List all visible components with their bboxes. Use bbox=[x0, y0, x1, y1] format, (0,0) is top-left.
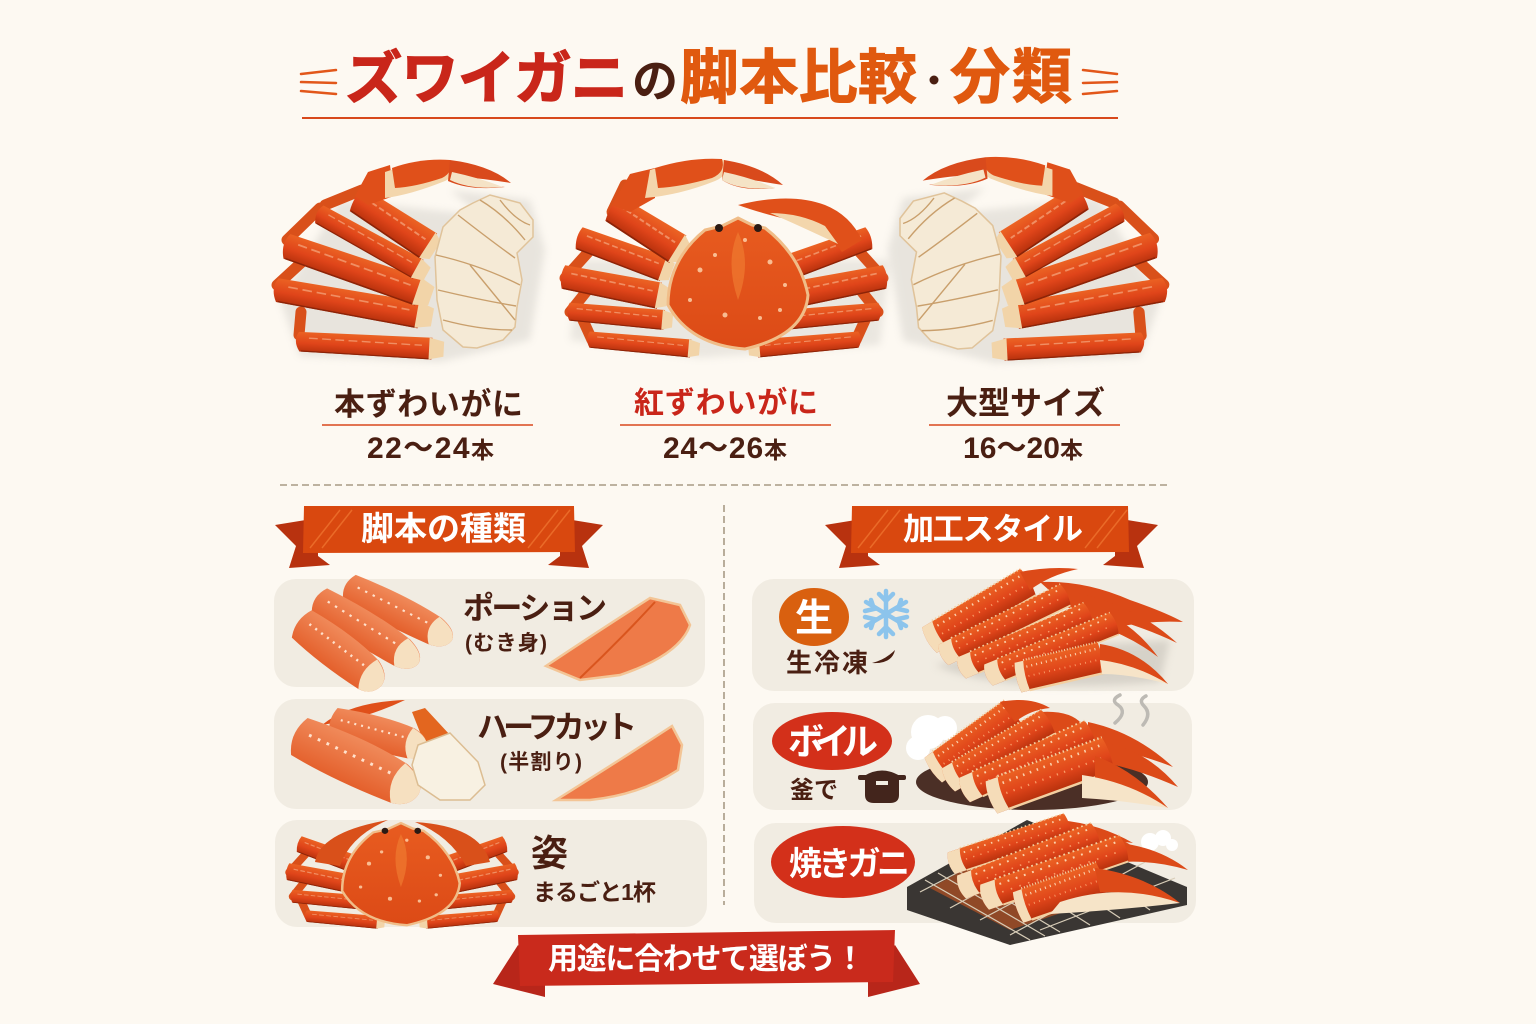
ribbon heading: 脚本の種類 bbox=[275, 506, 603, 568]
panel: ボイル: 釜で bbox=[790, 777, 838, 804]
label: 紅ずわいがに: 24～26本 bbox=[663, 432, 787, 465]
panel: ポーション: ポーション bbox=[463, 591, 607, 626]
icon: half-cut legs bbox=[284, 700, 485, 813]
icon: peeled portions bbox=[286, 571, 460, 700]
panel: ポーション bbox=[274, 571, 705, 700]
icon: pot bbox=[858, 770, 906, 803]
ribbon heading: 加工スタイル bbox=[825, 506, 1158, 568]
panel: 姿: 姿 bbox=[531, 833, 568, 874]
title bbox=[301, 44, 1118, 118]
label: 大型サイズ: 大型サイズ bbox=[946, 385, 1105, 421]
crab leg stack: boiled bbox=[922, 699, 1178, 814]
badge: ボイル: ボイル bbox=[788, 721, 878, 762]
icon: steam cloud bbox=[906, 715, 957, 760]
label: 本ずわいがに: 本ずわいがに bbox=[334, 387, 523, 422]
badge: 焼きガニ: 焼きガニ bbox=[789, 845, 910, 882]
title: 脚本比較 bbox=[680, 45, 917, 111]
label: 本ずわいがに: 22～24本 bbox=[367, 432, 494, 465]
panel: 姿 bbox=[275, 820, 707, 929]
panel: ボイル bbox=[753, 695, 1192, 814]
crab leg stack: grilled bbox=[945, 813, 1188, 923]
badge: 生: 生 bbox=[795, 598, 833, 640]
panel: 姿: まるごと1杯 bbox=[533, 879, 656, 905]
panel: 生冷凍: 生冷凍 bbox=[786, 648, 868, 678]
badge: 生 bbox=[779, 588, 849, 646]
crab leg stack: raw frozen bbox=[919, 568, 1183, 693]
icon: half-cut slice bbox=[556, 726, 682, 800]
label: 本ずわいがに bbox=[322, 387, 533, 465]
icon: whole crab bbox=[285, 820, 519, 929]
bottom banner: 用途に合わせて選ぼう！ bbox=[548, 943, 865, 976]
panel: ハーフカット: ハーフカット bbox=[477, 710, 637, 745]
panel: ハーフカット bbox=[274, 699, 704, 813]
icon: grill bbox=[907, 820, 1187, 945]
icon: smoke bbox=[1141, 830, 1178, 851]
panel: 生冷凍 bbox=[752, 568, 1194, 693]
crab illustration: 本ずわいがに bbox=[271, 160, 545, 362]
panel: ハーフカット: (半割り) bbox=[500, 751, 582, 774]
panel: 焼きガニ bbox=[754, 813, 1196, 945]
icon: steam bbox=[1114, 695, 1148, 725]
icon: swoosh bbox=[872, 650, 895, 663]
panel: ポーション: (むき身) bbox=[465, 632, 547, 655]
bottom banner bbox=[493, 930, 920, 997]
icon: plate bbox=[916, 754, 1148, 810]
title: の bbox=[632, 55, 678, 107]
label: 大型サイズ bbox=[929, 385, 1120, 465]
ribbon heading: 脚本の種類: 脚本の種類 bbox=[361, 510, 526, 547]
label: 紅ずわいがに bbox=[620, 386, 831, 465]
label: 大型サイズ: 16～20本 bbox=[963, 432, 1083, 465]
crab illustration: 大型サイズ bbox=[888, 157, 1170, 363]
label: 紅ずわいがに: 紅ずわいがに bbox=[634, 386, 818, 420]
badge: ボイル bbox=[772, 712, 892, 770]
title: 分類 bbox=[950, 44, 1072, 111]
badge: 焼きガニ bbox=[771, 826, 915, 898]
ribbon heading: 加工スタイル: 加工スタイル bbox=[903, 512, 1083, 547]
crab illustration: 紅ずわいがに bbox=[559, 159, 890, 358]
title: ズワイガニ bbox=[345, 47, 628, 111]
icon: portion slice bbox=[546, 598, 690, 680]
icon: snowflake bbox=[865, 591, 907, 637]
